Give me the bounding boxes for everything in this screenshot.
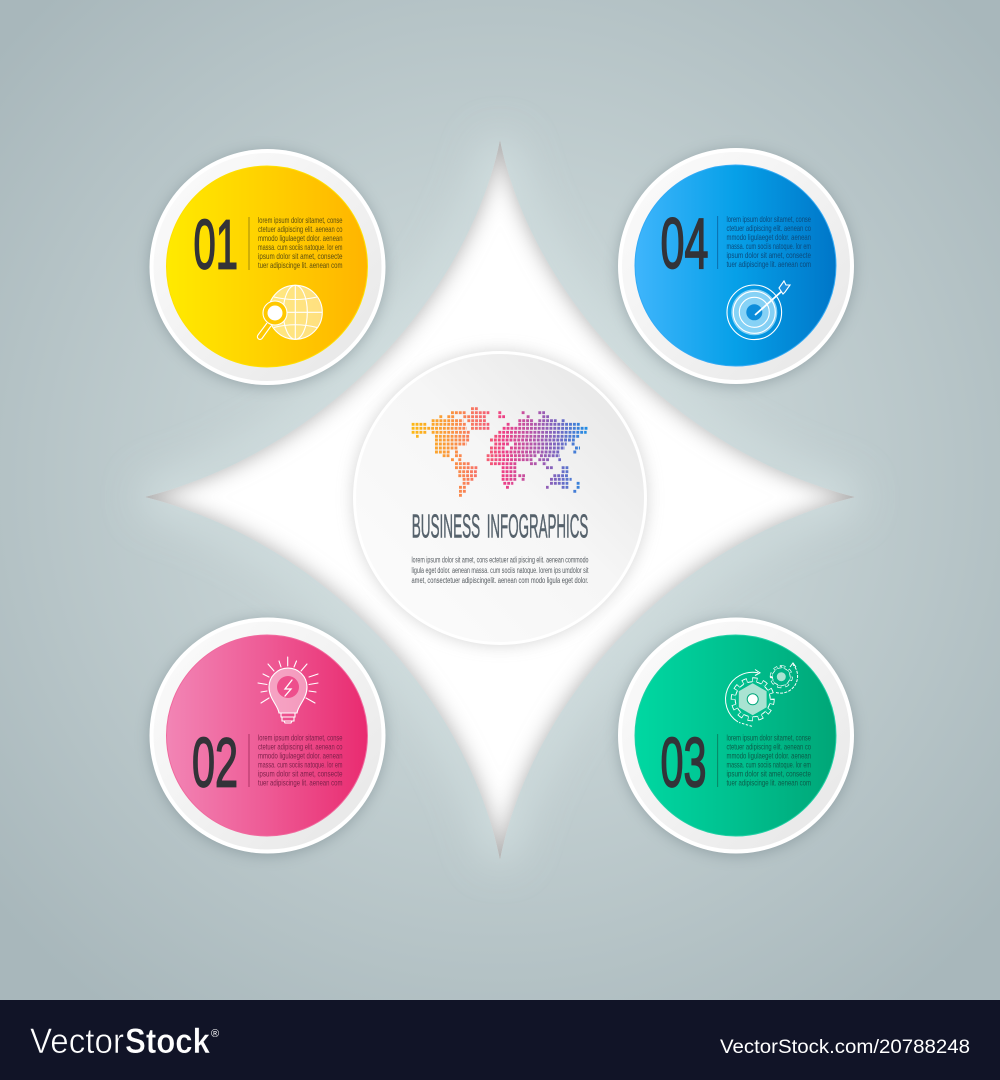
VectorStock logo: Stock xyxy=(125,1022,210,1061)
text block 02: mmodo ligulaeget dolor. aenean xyxy=(258,752,343,760)
number 01: 01 xyxy=(194,206,238,284)
VectorStock logo xyxy=(30,1022,219,1061)
text block 02: tuer adipiscinge lit. aenean com xyxy=(258,778,343,788)
text block 03: mmodo ligulaeget dolor. aenean xyxy=(726,752,811,760)
VectorStock logo: Vector xyxy=(30,1022,124,1061)
text block 01: tuer adipiscinge lit. aenean com xyxy=(258,261,343,270)
text block 02: ipsum dolor sit amet, consecte xyxy=(258,770,343,778)
text block 02: massa. cum sociis natoque. lor em xyxy=(258,760,343,770)
text block 01: mmodo ligulaeget dolor. aenean xyxy=(258,234,343,243)
text block 01 xyxy=(258,216,343,270)
number 03: 03 xyxy=(660,724,706,802)
text block 03: ctetuer adipiscing elit. aenean co xyxy=(726,742,811,752)
four-point star panel xyxy=(145,140,855,860)
text block 04: ipsum dolor sit amet, consecte xyxy=(726,251,811,260)
centre paragraph: lorem ipsum dolor sit amet, cons ectetuer adi piscing elit. aenean commodo xyxy=(412,555,589,564)
panel: 02 pink circle xyxy=(150,618,386,854)
panel: central circle xyxy=(353,351,647,645)
centre paragraph: amet, consectetuer adipiscingelit. aenean com modo ligula eget dolor. xyxy=(412,576,588,585)
icon: gears xyxy=(726,663,798,726)
centre paragraph: ligula eget dolor. aenean massa. cum sociis natoque. lorem ips umdolor sit xyxy=(412,566,589,575)
text block 04: lorem ipsum dolor sitamet, conse xyxy=(726,215,811,224)
panel: 01 yellow circle xyxy=(150,149,386,385)
icon: globe with magnifier xyxy=(257,285,322,339)
number 04: 04 xyxy=(660,205,708,284)
text block 03 xyxy=(726,734,811,788)
text block 04 xyxy=(726,215,811,269)
text block 01: lorem ipsum dolor sitamet, conse xyxy=(258,216,343,225)
text block 04: ctetuer adipiscing elit. aenean co xyxy=(726,224,811,233)
title: BUSINESS xyxy=(412,508,480,546)
panel: central circle: INFOGRAPHICS xyxy=(487,508,588,546)
icon: target with arrow xyxy=(727,281,790,340)
panel: 03 green circle xyxy=(618,618,854,854)
text block 03: lorem ipsum dolor sitamet, conse xyxy=(726,734,811,742)
text block 02: lorem ipsum dolor sitamet, conse xyxy=(258,734,343,742)
text block 03: ipsum dolor sit amet, consecte xyxy=(726,770,811,778)
text block 02: ctetuer adipiscing elit. aenean co xyxy=(258,742,343,752)
number 02: 02 xyxy=(192,724,238,802)
VectorStock logo: ® xyxy=(211,1028,219,1040)
text block 01: ctetuer adipiscing elit. aenean co xyxy=(258,225,343,234)
text block 03: tuer adipiscinge lit. aenean com xyxy=(726,778,811,788)
text block 03: massa. cum sociis natoque. lor em xyxy=(726,760,811,770)
panel: 04 blue circle xyxy=(618,148,854,384)
text block 04: mmodo ligulaeget dolor. aenean xyxy=(726,233,811,242)
text block 02 xyxy=(258,734,343,788)
text block 01: ipsum dolor sit amet, consecte xyxy=(258,252,343,261)
text block 01: massa. cum sociis natoque. lor em xyxy=(258,243,343,252)
text block 04: massa. cum sociis natoque. lor em xyxy=(726,242,811,251)
icon: light bulb xyxy=(258,657,318,723)
footer bar xyxy=(0,1000,1000,1080)
text block 04: tuer adipiscinge lit. aenean com xyxy=(726,260,811,269)
world map of pixel dots xyxy=(412,409,588,495)
centre paragraph xyxy=(412,555,589,585)
image id: VectorStock.com/20788248 xyxy=(720,1037,970,1058)
